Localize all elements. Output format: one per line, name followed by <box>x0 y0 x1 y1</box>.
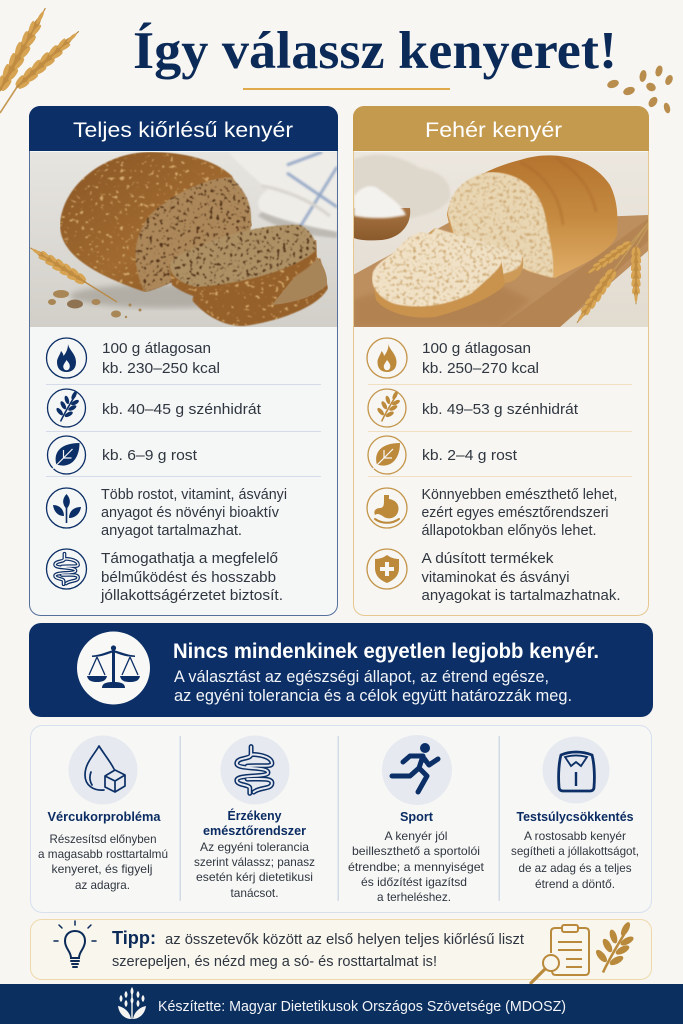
text: digestion <box>100 551 283 604</box>
text: digestion: jóllakottságérzetet biztosít. <box>100 588 283 604</box>
tip text: az összetevők között az első helyen teljes kiőrlésű liszt <box>165 932 524 948</box>
text: blood sugar: Részesítsd előnyben <box>50 832 156 846</box>
tip text: szerepeljen, és nézd meg a só- és rosttartalmat is! <box>112 954 437 970</box>
column: weight loss <box>511 736 639 891</box>
icon: wheat <box>48 389 86 427</box>
heading: sensitive digestion: emésztőrendszer <box>203 823 306 838</box>
text: calories <box>102 340 220 377</box>
icon: runner <box>382 735 452 805</box>
icon: stomach <box>367 488 407 528</box>
text: easier digestion <box>422 487 618 539</box>
text: fortified products <box>422 551 620 604</box>
heading: sensitive digestion <box>203 808 306 838</box>
text: fortified products: vitaminokat és ásványi <box>422 570 570 586</box>
text: sport: a terheléshez. <box>377 890 451 904</box>
text: digestion: Támogathatja a megfelelő <box>101 551 278 567</box>
panel header: whole grain: Teljes kiőrlésű kenyér <box>73 119 293 142</box>
text: fortified products: anyagokat is tartalmazhatnak. <box>422 588 620 604</box>
text: calories: kb. 250–270 kcal <box>422 360 539 377</box>
text: fibre: kb. 2–4 g rost <box>422 447 518 464</box>
tip text: Tipp: <box>112 928 156 948</box>
heading: weight loss: Testsúlycsökkentés <box>516 809 634 824</box>
text: blood sugar: kenyeret, és figyelj <box>52 862 152 876</box>
icon: leaf <box>48 436 86 474</box>
icon: sprout <box>46 488 86 528</box>
text: weight loss: de az adag és a teljes <box>518 861 632 875</box>
text: benefits of whole grain <box>101 487 287 539</box>
icon: drop and sugar cube <box>68 736 138 804</box>
heading: blood sugar: Vércukorprobléma <box>48 809 161 824</box>
decoration: wheat ears top left <box>0 4 84 113</box>
list: whole grain facts <box>46 338 321 604</box>
photo: whole grain bread loaf and slices <box>27 152 337 327</box>
panel header: whole grain <box>29 106 338 151</box>
text: sensitive digestion <box>194 840 315 900</box>
column: blood sugar <box>38 736 168 892</box>
panel: situations <box>30 726 652 912</box>
text: weight loss: segítheti a jóllakottságot, <box>511 844 639 858</box>
text: benefits of whole grain: anyagot tartalmazhat. <box>101 523 242 539</box>
text: sport: A kenyér jól <box>384 829 448 843</box>
panel: whole grain bread <box>27 106 338 616</box>
text: digestion: bélműködést és hosszabb <box>101 570 276 586</box>
text: fibre: kb. 6–9 g rost <box>102 447 198 464</box>
text: fortified products: A dúsított termékek <box>422 551 554 567</box>
text: sport: és időzítést igazítsd <box>361 875 467 889</box>
icon: clipboard and magnifier <box>531 925 589 983</box>
text: blood sugar <box>38 832 168 892</box>
decoration: scattered grains top right <box>606 65 674 114</box>
text: sensitive digestion: esetén kérj dietetikusi <box>196 870 313 884</box>
callout banner: no single best bread <box>29 623 653 717</box>
panel header: white bread <box>353 106 649 151</box>
icon: light bulb <box>54 921 96 967</box>
title underline <box>243 88 450 90</box>
icon: flame <box>46 338 86 378</box>
text: easier digestion: ezért egyes emésztőrendszeri <box>422 505 608 521</box>
text: blood sugar: az adagra. <box>75 878 130 892</box>
text: benefits of whole grain: anyagot és növényi bioaktív <box>101 505 280 521</box>
banner text: az egyéni tolerancia és a célok együtt határozzák meg. <box>174 687 572 705</box>
text: sensitive digestion: tanácsot. <box>230 886 278 900</box>
text: calories: kb. 230–250 kcal <box>102 360 220 377</box>
column: sensitive digestion <box>194 736 315 900</box>
text: sport <box>348 829 485 904</box>
text: weight loss: A rostosabb kenyér <box>524 829 626 843</box>
text: blood sugar: a magasabb rosttartalmú <box>38 847 168 861</box>
icon: shield <box>367 549 407 589</box>
text: weight loss: étrend a döntő. <box>535 877 615 891</box>
icon: wheat logo <box>118 987 146 1019</box>
text: easier digestion: Könnyebben emészthető lehet, <box>422 487 618 503</box>
column: sport <box>348 735 485 904</box>
text: calories: 100 g átlagosan <box>102 340 211 357</box>
text: calories: 100 g átlagosan <box>422 340 531 357</box>
footer credit: Készítette: Magyar Dietetikusok Országos Szövetsége (MDOSZ) <box>158 998 566 1015</box>
icon: leaf <box>368 436 406 474</box>
icon: intestine <box>46 549 86 589</box>
panel header: white bread: Fehér kenyér <box>425 119 562 142</box>
text: easier digestion: állapotokban előnyös lehet. <box>422 523 596 539</box>
text: carbohydrate: kb. 49–53 g szénhidrát <box>422 401 579 418</box>
text: sport: étrendbe; a mennyiséget <box>348 860 485 874</box>
panel: white bread <box>353 106 649 616</box>
icon: wheat <box>368 389 406 427</box>
tip box <box>30 920 652 983</box>
text: sensitive digestion: szerint válassz; panasz <box>194 855 315 869</box>
banner text <box>174 668 572 705</box>
photo: white bread loaf on board <box>353 152 649 327</box>
tip text <box>112 928 524 970</box>
title: Így válassz kenyeret! <box>133 22 617 80</box>
banner text: A választást az egészségi állapot, az étrend egésze, <box>174 668 549 686</box>
heading: sensitive digestion: Érzékeny <box>228 808 282 823</box>
icon: balance scale <box>77 632 150 704</box>
text: benefits of whole grain: Több rostot, vitamint, ásványi <box>101 487 287 503</box>
text: sport: beilleszthető a sportolói <box>352 844 480 858</box>
heading: sport: Sport <box>400 809 434 824</box>
text: sensitive digestion: Az egyéni tolerancia <box>200 840 309 854</box>
text: calories <box>422 340 539 377</box>
icon: wheat sprig <box>594 921 635 972</box>
icon: bathroom scale <box>542 736 610 804</box>
icon: flame <box>367 338 407 378</box>
text: carbohydrate: kb. 40–45 g szénhidrát <box>102 401 262 418</box>
banner heading: Nincs mindenkinek egyetlen legjobb kenyér. <box>173 640 599 663</box>
list: white bread facts <box>367 338 632 604</box>
text: weight loss <box>511 829 639 891</box>
footer <box>0 984 683 1024</box>
icon: intestine <box>220 736 290 804</box>
